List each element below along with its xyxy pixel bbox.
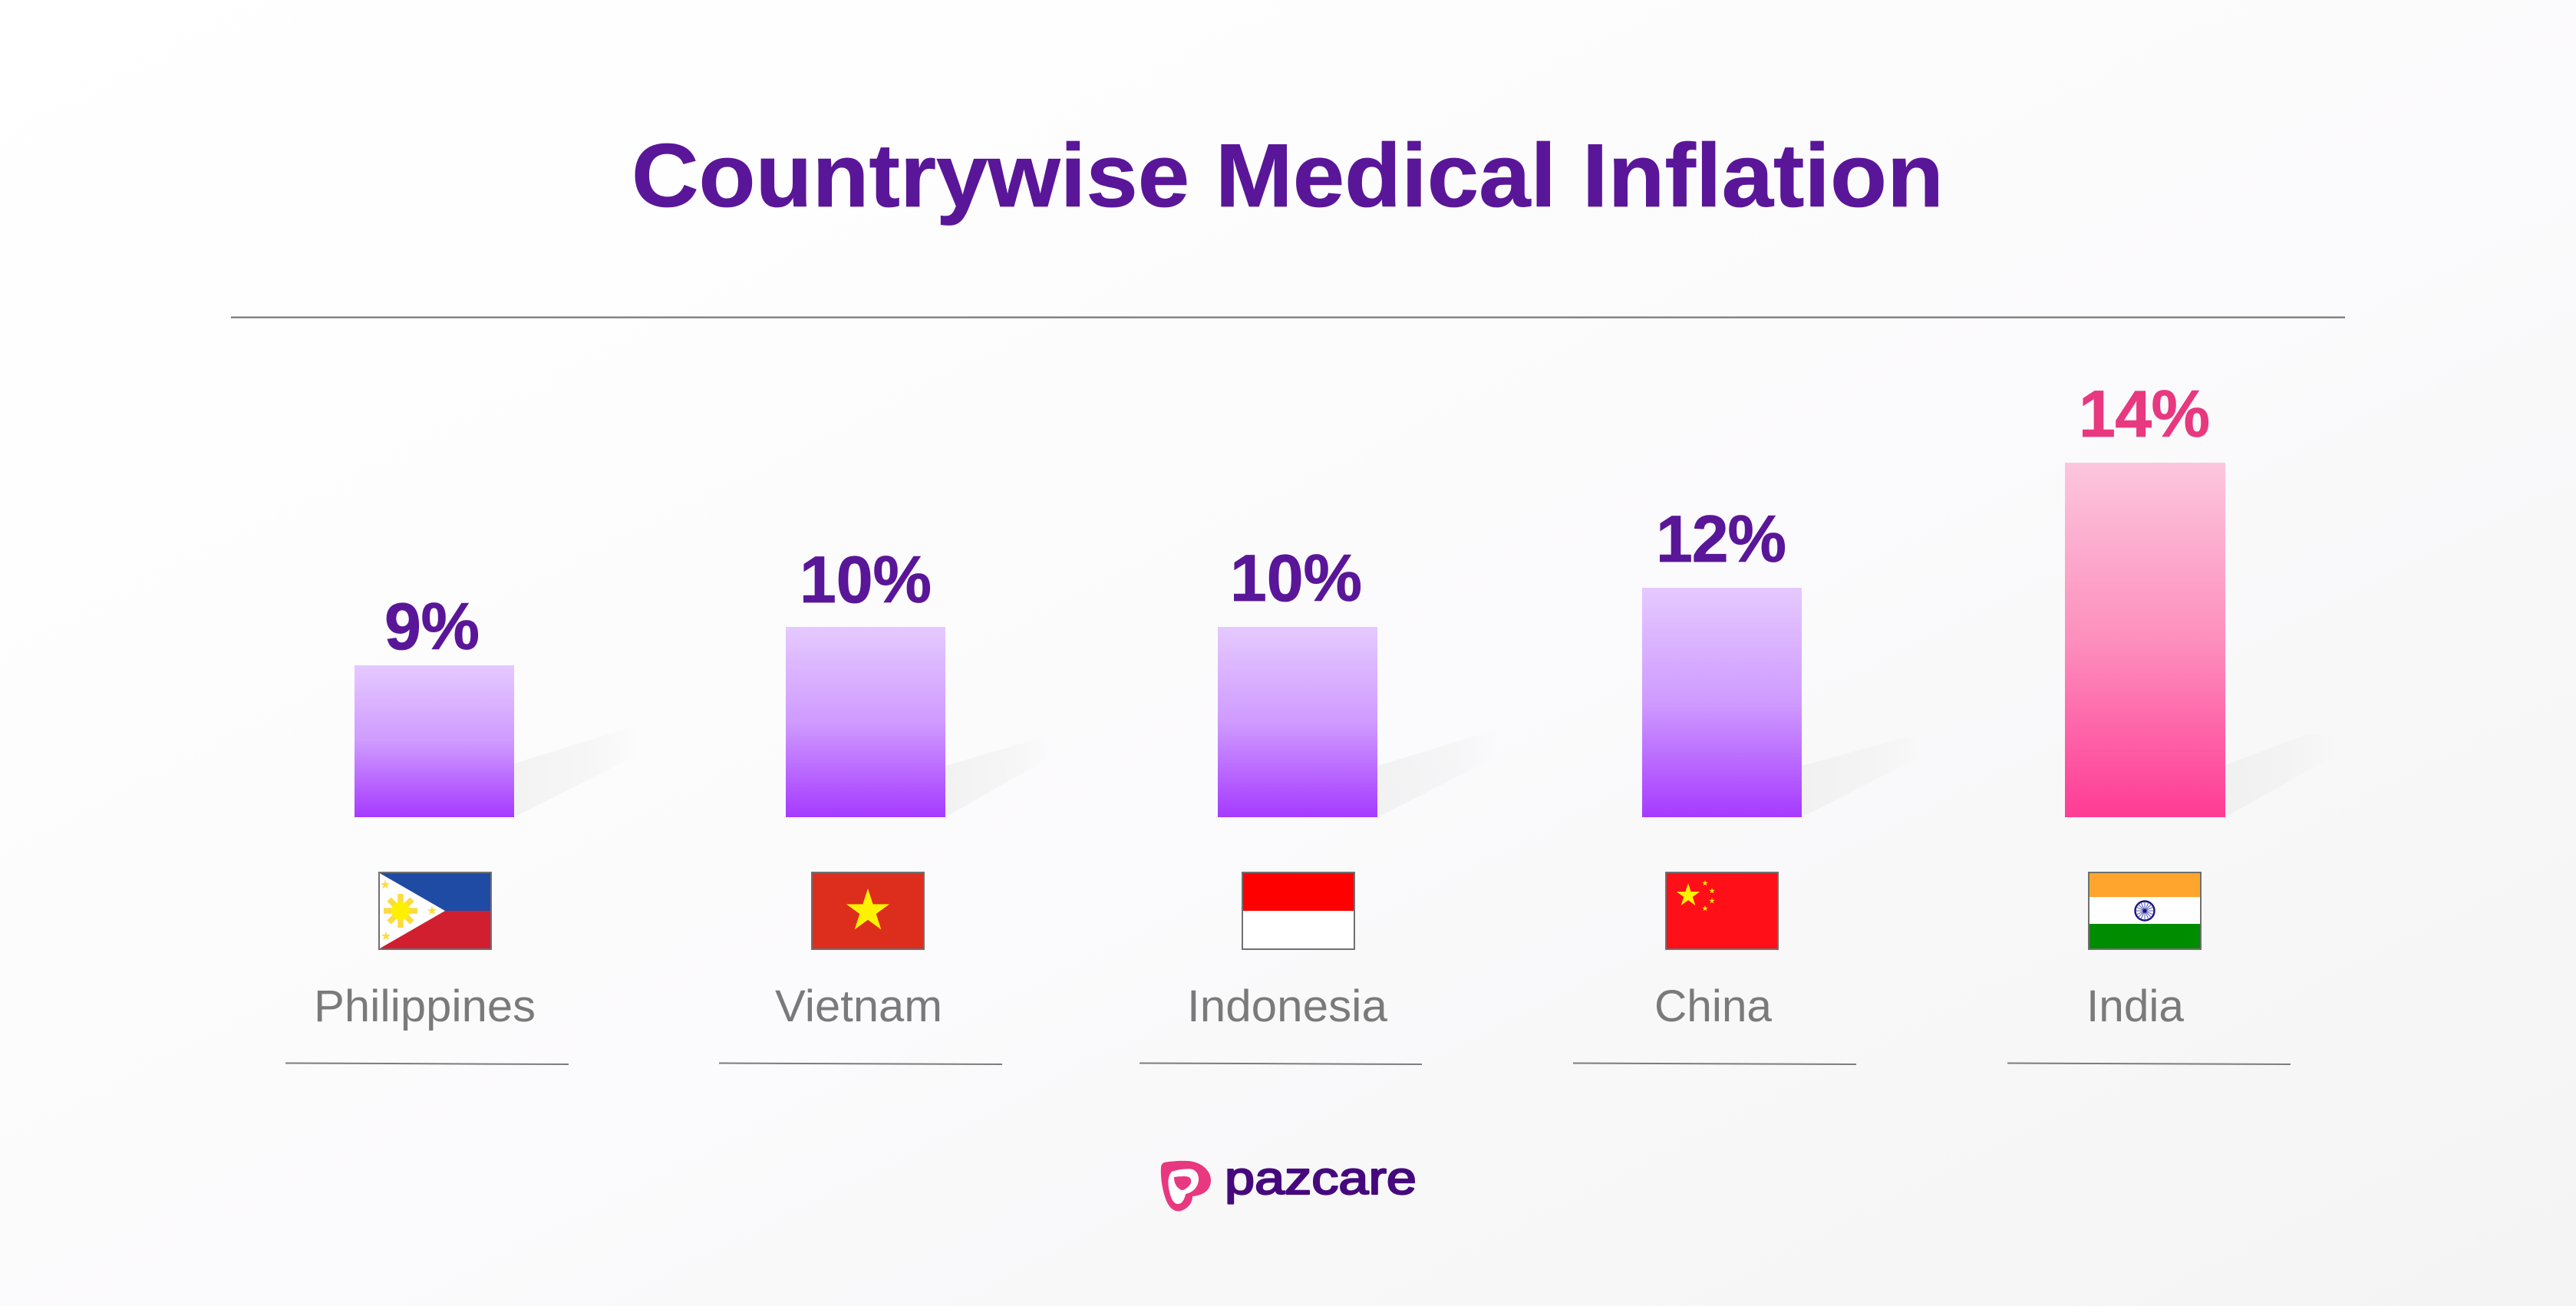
value: Vietnam 10%: 10% xyxy=(800,543,932,617)
label: India: India xyxy=(2086,981,2185,1031)
label: China: China xyxy=(1654,981,1773,1031)
bar shadow: Philippines xyxy=(514,725,638,817)
chart: Philippines column xyxy=(285,590,638,1065)
bar shadow: Indonesia xyxy=(1377,729,1499,817)
bar: Indonesia 10% xyxy=(1218,627,1377,817)
label: Philippines: Philippines xyxy=(314,981,536,1031)
bar: Vietnam 10% xyxy=(786,627,945,817)
chart: Vietnam column xyxy=(719,543,1053,1065)
value: India 14%: 14% xyxy=(2079,378,2210,451)
bar: Philippines 9% xyxy=(355,665,514,817)
value: Indonesia 10%: 10% xyxy=(1230,542,1362,615)
logo: pazcare xyxy=(1161,1153,1417,1211)
chart: Indonesia column xyxy=(1140,542,1499,1065)
icon: China flag xyxy=(1665,872,1779,950)
icon: Indonesia flag xyxy=(1242,872,1355,950)
icon: India flag xyxy=(2088,872,2202,950)
value: 9%: 9% xyxy=(384,590,480,664)
wordmark: pazcare: pazcare xyxy=(1225,1153,1417,1204)
bar shadow: China xyxy=(1802,733,1922,817)
chart: China column xyxy=(1573,503,1922,1065)
value: China 12%: 12% xyxy=(1656,503,1786,576)
icon: Vietnam flag xyxy=(811,872,925,950)
icon: Philippines flag xyxy=(378,872,492,950)
bar: India 14% xyxy=(2065,463,2225,817)
bar: China 12% xyxy=(1642,588,1802,817)
bar shadow: India xyxy=(2225,734,2335,817)
label: Indonesia: Indonesia xyxy=(1187,981,1388,1031)
icon: pazcare heart P mark xyxy=(1161,1161,1211,1211)
label: Vietnam: Vietnam xyxy=(775,981,942,1031)
chart: India column xyxy=(2007,378,2335,1065)
bar shadow: Vietnam xyxy=(945,734,1053,817)
title: Countrywise Medical Inflation xyxy=(632,125,1944,226)
